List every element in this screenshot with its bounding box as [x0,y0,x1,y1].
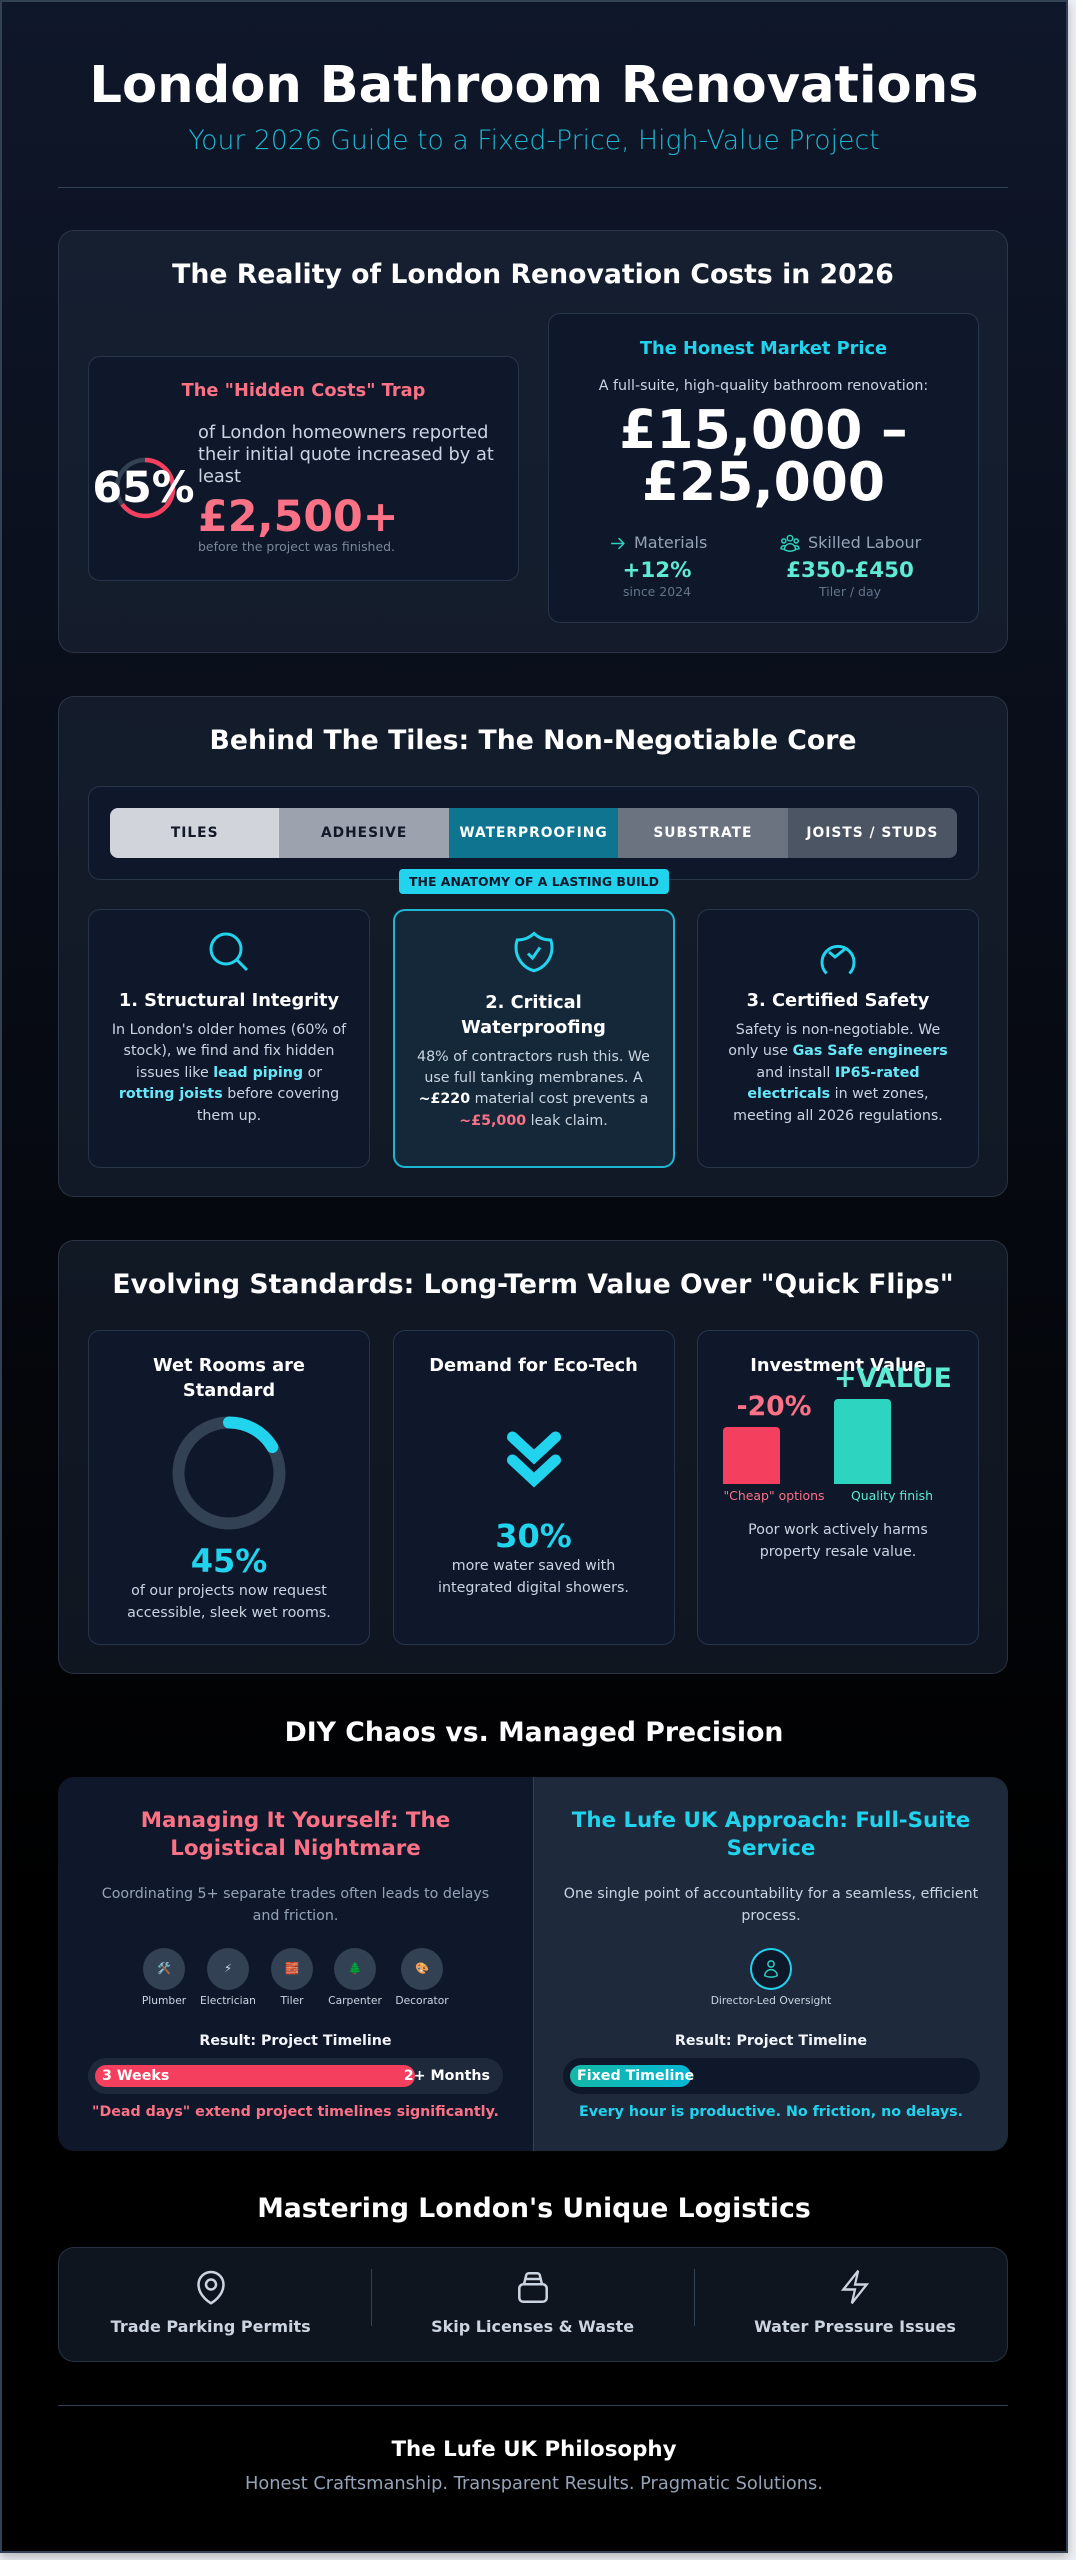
column text: and friction. [253,1908,338,1924]
column text: process. [741,1908,801,1924]
caption: before the project was finished. [198,539,395,554]
timeline fill [95,2065,415,2087]
layer stack [110,808,957,858]
end label: 2+ Months [404,2068,490,2084]
heading: reality of costs: The Reality of London Renovation Costs in 2026 [172,259,894,290]
badge: anatomy of a lasting build [399,869,669,894]
card text: issues like lead piping or [136,1065,322,1081]
card text: Safety is non-negotiable. We [736,1022,940,1038]
icon: map pin [197,2270,225,2305]
caption: since 2024: since 2024 [623,584,691,599]
diagram: wall layers [88,786,979,880]
icon: gauge [820,944,856,974]
card text: rotting joists before covering [119,1086,339,1102]
trade: plumber: Plumber [142,1994,186,2007]
card text [127,1583,331,1621]
card text: use full tanking membranes. A [424,1070,643,1086]
column text: One single point of accountability for a seamless, efficient [564,1886,978,1902]
card text [728,1022,948,1124]
card title [461,992,606,1038]
layer stack: SUBSTRATE [653,825,752,841]
title: London Bathroom Renovations [89,55,979,115]
card text: integrated digital showers. [438,1580,629,1596]
donut chart: 65 percent [115,458,176,518]
panel: renovation costs [58,230,1008,653]
card text: meeting all 2026 regulations. [733,1108,943,1124]
price range: £15,000 – [619,398,908,461]
price range: £25,000 [642,450,885,513]
item: parking permits [110,2270,311,2336]
trade: carpenter: Carpenter [328,1994,382,2007]
trade: carpenter: 🌲 [348,1962,362,1975]
trade: decorator [395,1948,449,2007]
stat: materials increase: +12% [622,558,692,583]
column heading: The Lufe UK Approach: Full-Suite [572,1808,970,1832]
result label: Result: Project Timeline [199,2033,392,2049]
card: investment value [697,1330,979,1645]
column text: Coordinating 5+ separate trades often leads to delays [102,1886,489,1902]
card text: Poor work actively harms [748,1522,928,1538]
icon: team [780,534,800,552]
stat: labour rate: £350-£450 [786,558,914,583]
timeline bar: DIY [88,2058,503,2094]
label: skilled labour: Skilled Labour [808,533,921,552]
card text: them up. [197,1108,261,1124]
card text: more water saved with [452,1558,615,1574]
icon: double chevron down [507,1432,561,1488]
badge: anatomy of a lasting build: THE ANATOMY OF A LASTING BUILD [409,874,659,889]
oversight icon and label [711,1948,832,2007]
label: Water Pressure Issues [754,2317,956,2336]
card text: and install IP65-rated [756,1065,920,1081]
card text: electricals in wet zones, [747,1086,929,1102]
card title: Demand for Eco-Tech [429,1354,638,1376]
bar label: quality: Quality finish [851,1488,933,1503]
card heading: The "Hidden Costs" Trap [182,380,425,401]
card text [417,1048,650,1129]
label: Skip Licenses & Waste [431,2317,634,2336]
bar value: -20%: -20% [737,1391,811,1422]
card text [438,1558,629,1596]
stat: 65%: 65% [92,463,195,513]
icon: bolt [841,2270,869,2304]
icon: director [750,1948,792,1990]
text: quote increase [198,422,494,487]
footer tagline: Honest Craftsmanship. Transparent Results. Pragmatic Solutions. [245,2473,823,2494]
comparison panel [58,1777,1008,2151]
card text: ~£220 material cost prevents a [419,1091,648,1107]
trade: carpenter [328,1948,382,2007]
stat: £2,500+: £2,500+ [198,492,398,542]
trade: decorator: Decorator [395,1994,449,2007]
column heading: Service [727,1836,815,1860]
layer stack: JOISTS / STUDS [806,825,938,841]
card text: 48% of contractors rush this. We [417,1048,650,1064]
heading: long-term value: Evolving Standards: Long-Term Value Over "Quick Flips" [112,1269,954,1300]
trade: tiler: 🧱 [285,1962,299,1975]
heading: London logistics: Mastering London's Unique Logistics [257,2193,811,2224]
label: materials: Materials [634,533,707,552]
column text [102,1886,489,1924]
trade: plumber: 🛠️ [157,1962,171,1975]
bar label: cheap: "Cheap" options [723,1488,825,1503]
column heading [572,1808,970,1860]
card title: 1. Structural Integrity [119,990,339,1010]
layer stack: ADHESIVE [321,825,407,841]
heading: non-negotiable core: Behind The Tiles: The Non-Negotiable Core [210,725,856,756]
card text [748,1522,928,1560]
card text: only use Gas Safe engineers [728,1043,948,1059]
trade: decorator: 🎨 [415,1962,429,1975]
icon: arrow [611,538,625,550]
card text [112,1022,346,1124]
card: critical waterproofing [392,909,674,1168]
bar value: +VALUE: +VALUE [834,1363,952,1394]
card text: stock), we find and fix hidden [124,1043,334,1059]
column text [564,1886,978,1924]
result note: Every hour is productive. No friction, no delays. [579,2104,963,2120]
panel: behind the tiles [58,696,1008,1197]
card title: Investment Value [750,1354,926,1376]
layer stack: TILES [171,825,219,841]
trade: tiler [271,1948,313,2007]
card title: 3. Certified Safety [747,990,929,1010]
label: Trade Parking Permits [111,2317,311,2336]
card text: of our projects now request [131,1583,327,1599]
result label: Result: Project Timeline [675,2033,867,2049]
icon: magnifying glass [210,932,248,971]
result note: "Dead days" extend project timelines significantly. [92,2104,499,2120]
card: honest market price [548,313,979,623]
footer title: The Lufe UK Philosophy [391,2437,677,2462]
card: hidden costs trap [88,356,519,581]
card text: property resale value. [760,1544,916,1560]
card title: Wet Rooms are [153,1354,305,1376]
panel: evolving standards [58,1240,1008,1674]
timeline bar: managed [563,2058,980,2094]
text: quote increase: least [198,466,241,487]
layer stack: WATERPROOFING [459,825,608,841]
column: managing it yourself [58,1777,533,2151]
card text: In London's older homes (60% of [112,1022,346,1038]
fill label: Fixed Timeline [577,2068,694,2084]
caption: tiler per day: Tiler / day [819,584,881,599]
panel: logistics [58,2247,1008,2362]
bar: quality finish [834,1399,891,1484]
column heading [141,1808,450,1860]
trade: electrician: Electrician [200,1994,256,2007]
bar: cheap options [723,1427,780,1484]
start label: 3 Weeks [102,2068,169,2084]
heading: DIY chaos vs managed precision: DIY Chaos vs. Managed Precision [285,1717,783,1748]
card: wet rooms [88,1330,370,1645]
column: Lufe UK approach [533,1777,1008,2151]
trade: electrician: ⚡︎ [224,1962,232,1975]
stat: 45%: 45% [191,1542,267,1580]
card title: 2. Critical [485,992,582,1012]
text: quote increase: of London homeowners reported [198,422,488,443]
card title: Standard [183,1380,275,1400]
card text: accessible, sleek wet rooms. [127,1605,331,1621]
column heading: Managing It Yourself: The [141,1808,450,1832]
description: A full-suite, high-quality bathroom renovation: [599,378,928,394]
card title [153,1354,305,1400]
donut chart: wet rooms [172,1416,286,1530]
card text: ~£5,000 leak claim. [459,1113,608,1129]
price range [619,398,908,513]
timeline fill [570,2065,691,2087]
card title: Waterproofing [461,1016,606,1038]
card: eco-tech [392,1330,674,1645]
card: structural integrity [88,909,370,1168]
trade: tiler: Tiler [280,1994,304,2007]
card heading: The Honest Market Price [640,338,887,359]
card: certified safety [697,909,979,1168]
item: skip licenses [431,2272,634,2336]
label: Director-Led Oversight [711,1994,831,2007]
column heading: Logistical Nightmare [170,1836,421,1860]
icon: skip [518,2272,548,2303]
icon: shield [514,932,554,972]
item: water pressure [754,2270,956,2336]
stat: 30%: 30% [495,1517,572,1555]
trade: plumber [142,1948,186,2007]
text: quote increase: their initial quote increased by at [198,444,494,465]
subtitle: Your 2026 Guide to a Fixed-Price, High-Value Project [188,125,880,156]
trade: electrician [200,1948,256,2007]
